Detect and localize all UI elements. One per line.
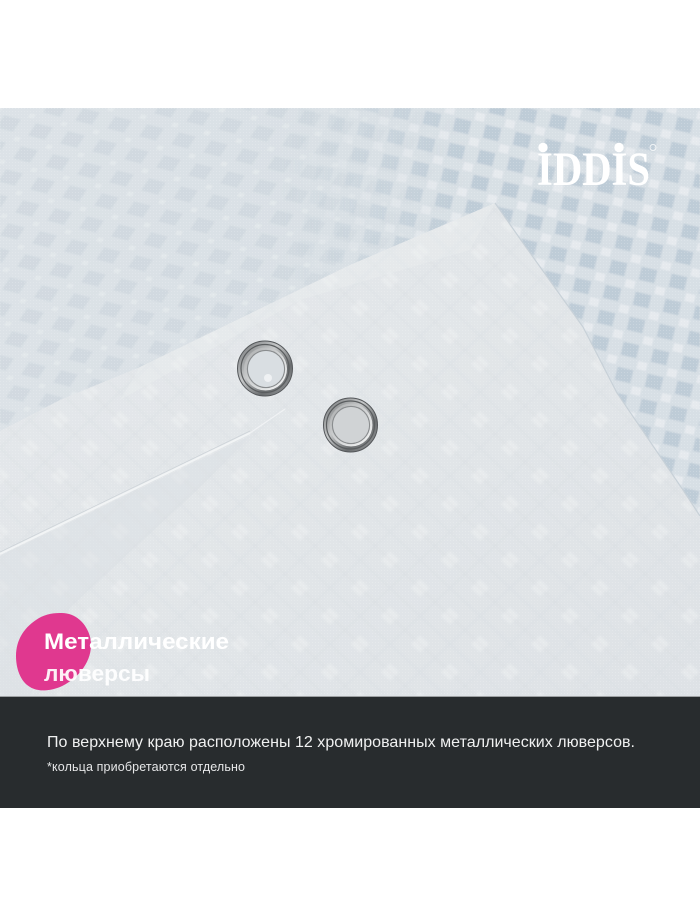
upper fold highlight (120, 203, 495, 400)
infographic (0, 108, 700, 808)
fold edge shadow (495, 203, 700, 516)
lower fabric layer shade (0, 436, 250, 696)
photo: curtain fabric (0, 108, 700, 696)
icon: metal grommet 1 (238, 341, 292, 396)
logo: IDDIS: IDDIS (537, 143, 650, 196)
accent: pink blob (16, 613, 91, 690)
footnote text: *кольца приобретаются отдельно (47, 760, 245, 774)
heading: metal grommets: люверсы (44, 661, 150, 686)
back fabric panel with checked pattern (0, 108, 700, 514)
hem seam (0, 433, 250, 554)
caption text: По верхнему краю расположены 12 хромированных металлических люверсов. (47, 734, 635, 751)
heading: metal grommets (44, 629, 229, 686)
panel: dark caption band (0, 696, 700, 808)
folded front fabric panel (0, 203, 700, 696)
icon: metal grommet 2 (324, 398, 378, 452)
heading: metal grommets: Металлические (44, 629, 229, 654)
